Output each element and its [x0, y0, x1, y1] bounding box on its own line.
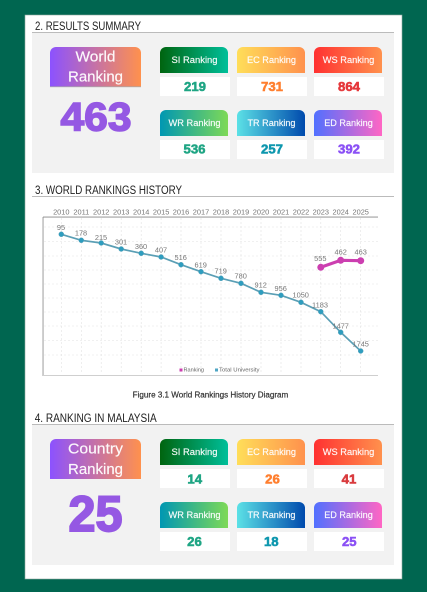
- WS ranking card: 41: [342, 471, 356, 486]
- total university series: 516: [175, 253, 187, 262]
- total university series: 719: [215, 267, 227, 276]
- total university series: 95: [57, 223, 65, 232]
- heading: ranking in malaysia: 4. RANKING IN MALAYSIA: [35, 413, 157, 425]
- year axis labels: 2016: [173, 208, 189, 216]
- TR ranking card: TR Ranking: [248, 118, 296, 128]
- EC ranking card: 731: [261, 79, 283, 94]
- TR ranking card: [237, 502, 307, 551]
- ED ranking card: 392: [338, 142, 360, 156]
- year axis labels: 2013: [113, 208, 129, 216]
- figure caption: Figure 3.1 World Rankings History Diagram: [133, 391, 289, 400]
- SI ranking card: [160, 47, 230, 96]
- total university series: 1745: [352, 339, 369, 348]
- year axis labels: 2015: [153, 208, 169, 216]
- ranking series: 462: [335, 247, 347, 256]
- WS ranking card: WS Ranking: [323, 447, 374, 457]
- total university series: 407: [155, 245, 167, 254]
- TR ranking card: [237, 110, 307, 159]
- total university series: 1050: [292, 290, 309, 299]
- TR ranking card: TR Ranking: [248, 510, 296, 520]
- chart legend: Ranking: [184, 368, 204, 374]
- EC ranking card: 26: [265, 471, 280, 486]
- year axis labels: 2023: [313, 208, 329, 216]
- WR ranking card: 536: [183, 142, 206, 156]
- total university series: 1477: [332, 321, 349, 330]
- SI ranking card: 14: [187, 471, 203, 486]
- year axis labels: 2024: [332, 208, 349, 216]
- SI ranking card: SI Ranking: [172, 447, 218, 457]
- country ranking card: Ranking: [68, 462, 123, 478]
- year axis labels: 2020: [253, 208, 269, 216]
- year axis labels: 2011: [73, 208, 89, 216]
- WR ranking card: WR Ranking: [168, 510, 220, 520]
- WR ranking card: WR Ranking: [168, 118, 220, 128]
- ranking series: [314, 247, 367, 271]
- SI ranking card: 219: [184, 79, 206, 94]
- year axis labels: 2017: [193, 208, 209, 216]
- ED ranking card: ED Ranking: [324, 118, 373, 128]
- country ranking card: [50, 439, 141, 479]
- total university series: 780: [235, 271, 247, 280]
- EC ranking card: [237, 47, 307, 96]
- year axis labels: 2025: [352, 208, 369, 216]
- year axis labels: 2010: [53, 208, 70, 216]
- heading: results summary: 2. RESULTS SUMMARY: [35, 21, 141, 33]
- year axis labels: 2018: [213, 208, 229, 216]
- TR ranking card: 18: [264, 534, 279, 549]
- total university series: 619: [195, 260, 207, 269]
- chart legend: [180, 368, 260, 374]
- total university series: 301: [115, 237, 127, 246]
- WR ranking card: [160, 110, 230, 159]
- ED ranking card: [314, 110, 384, 159]
- WS ranking card: 864: [338, 79, 361, 94]
- ED ranking card: ED Ranking: [324, 510, 373, 520]
- chart legend: Total University: [219, 368, 260, 374]
- year axis labels: 2014: [133, 208, 149, 216]
- WS ranking card: [314, 47, 384, 96]
- WR ranking card: [160, 502, 230, 551]
- total university series: 1183: [312, 300, 328, 309]
- total university series: 215: [95, 233, 107, 242]
- world ranking card: [50, 47, 141, 87]
- year axis labels: 2019: [233, 208, 249, 216]
- EC ranking card: EC Ranking: [247, 55, 296, 65]
- year axis labels: 2021: [273, 208, 289, 216]
- total university series: 956: [275, 284, 287, 293]
- WR ranking card: 26: [187, 534, 202, 549]
- WS ranking card: [314, 439, 384, 488]
- country ranking number: 25: [68, 486, 122, 542]
- total university series: 912: [255, 280, 267, 289]
- ranking series: 555: [314, 254, 326, 263]
- world ranking card: World: [76, 50, 116, 66]
- ED ranking card: [314, 502, 384, 551]
- EC ranking card: [237, 439, 307, 488]
- SI ranking card: [160, 439, 230, 488]
- SI ranking card: SI Ranking: [172, 55, 218, 65]
- EC ranking card: EC Ranking: [247, 447, 296, 457]
- heading: world rankings history: 3. WORLD RANKINGS HISTORY: [35, 185, 182, 197]
- total university series: 360: [135, 242, 147, 251]
- WS ranking card: WS Ranking: [323, 55, 374, 65]
- ED ranking card: 25: [342, 534, 357, 549]
- line chart: world rankings history: [42, 208, 378, 376]
- panel: ranking in malaysia: [32, 425, 394, 565]
- world ranking card: Ranking: [68, 70, 123, 86]
- year axis labels: [53, 208, 369, 216]
- year axis labels: 2012: [93, 208, 109, 216]
- TR ranking card: 257: [261, 142, 283, 156]
- country ranking card: Country: [68, 442, 124, 458]
- total university series: 178: [75, 229, 87, 238]
- year axis labels: 2022: [293, 208, 309, 216]
- ranking series: 463: [355, 247, 367, 256]
- panel: results summary: [32, 33, 394, 173]
- total university series: [57, 223, 369, 354]
- world ranking number: 463: [60, 95, 132, 139]
